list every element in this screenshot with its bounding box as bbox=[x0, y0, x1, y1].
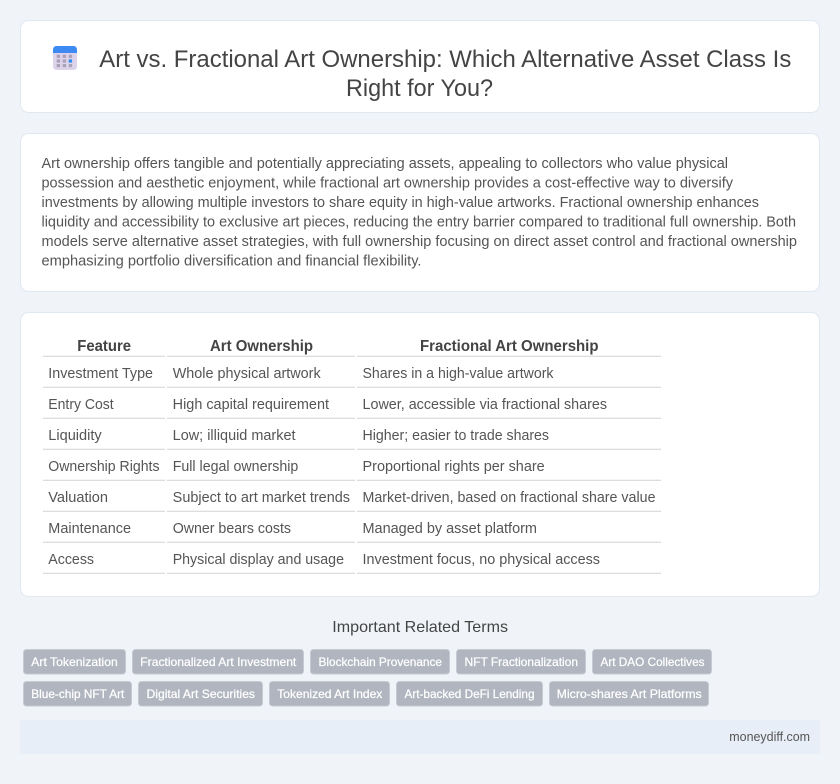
tag: Micro-shares Art Platforms bbox=[550, 682, 708, 706]
table row: liquidity: Higher; easier to trade shares bbox=[362, 428, 549, 444]
tag: Blue-chip NFT Art bbox=[24, 682, 132, 706]
table row: entry cost: High capital requirement bbox=[173, 397, 329, 413]
table row: entry cost bbox=[43, 397, 661, 419]
table row: investment type bbox=[43, 366, 661, 388]
table row: maintenance: Maintenance bbox=[48, 521, 131, 537]
table row: valuation bbox=[43, 490, 661, 512]
table row: access bbox=[43, 552, 661, 574]
table header row: Fractional Art Ownership bbox=[420, 338, 599, 355]
tag: Art DAO Collectives bbox=[592, 650, 712, 674]
tags: related terms bbox=[24, 650, 712, 706]
table row: entry cost: Entry Cost bbox=[48, 397, 114, 413]
tag: Micro-shares Art Platforms: Micro-shares Art Platforms bbox=[557, 687, 702, 701]
table row: investment type: Investment Type bbox=[48, 366, 153, 382]
text block: introduction paragraph: emphasizing portfolio diversification and financial flexibility. bbox=[42, 254, 422, 270]
table row: investment type: Whole physical artwork bbox=[173, 366, 321, 382]
table row: maintenance: Managed by asset platform bbox=[362, 521, 537, 537]
text block: introduction paragraph: investments by allowing multiple investors to share equity in high-value artworks. Fractional ownership enhances bbox=[42, 195, 759, 211]
panel: header bbox=[20, 20, 820, 112]
table row: ownership rights: Proportional rights per share bbox=[362, 459, 545, 475]
table row: liquidity: Liquidity bbox=[48, 428, 102, 444]
tag: Digital Art Securities: Digital Art Securities bbox=[146, 687, 255, 701]
table row: access: Investment focus, no physical access bbox=[362, 552, 600, 568]
text block: introduction paragraph: models serve alternative asset strategies, with full ownership focusing on direct asset control and fractional ownership bbox=[42, 234, 797, 250]
tag: Fractionalized Art Investment: Fractionalized Art Investment bbox=[140, 655, 297, 669]
footer: moneydiff.com bbox=[729, 729, 810, 744]
title: Art vs. Fractional Art Ownership: Which Alternative Asset Class Is bbox=[99, 46, 791, 73]
table header row: Art Ownership bbox=[210, 338, 313, 355]
table row: valuation: Subject to art market trends bbox=[173, 490, 350, 506]
table row: valuation: Market-driven, based on fractional share value bbox=[362, 490, 656, 506]
tag: Digital Art Securities bbox=[138, 682, 262, 706]
tag: Blockchain Provenance bbox=[310, 650, 450, 674]
table row: access: Physical display and usage bbox=[173, 552, 344, 568]
table row: maintenance: Owner bears costs bbox=[173, 521, 291, 537]
table row: ownership rights bbox=[43, 459, 661, 481]
heading: important related terms: Important Related Terms bbox=[332, 619, 508, 636]
text block: introduction paragraph: Art ownership offers tangible and potentially appreciating assets, appealing to collectors who value physical bbox=[42, 156, 728, 172]
text block: introduction paragraph bbox=[42, 156, 797, 270]
tag: Art Tokenization: Art Tokenization bbox=[31, 655, 118, 669]
table row: maintenance bbox=[43, 521, 661, 543]
table row: investment type: Shares in a high-value artwork bbox=[362, 366, 554, 382]
table row: entry cost: Lower, accessible via fractional shares bbox=[362, 397, 607, 413]
table header row bbox=[43, 338, 661, 357]
text block: introduction paragraph: liquidity and accessibility to exclusive art pieces, reducing the entry barrier compared to traditional full ownership. Both bbox=[42, 214, 796, 230]
panel: comparison table bbox=[20, 312, 820, 596]
tag: Tokenized Art Index: Tokenized Art Index bbox=[277, 687, 382, 701]
table row: ownership rights: Full legal ownership bbox=[173, 459, 298, 475]
table row: ownership rights: Ownership Rights bbox=[48, 459, 159, 475]
tag: Fractionalized Art Investment bbox=[132, 650, 304, 674]
table row: valuation: Valuation bbox=[48, 490, 108, 506]
tag: NFT Fractionalization: NFT Fractionalization bbox=[464, 655, 578, 669]
panel: introduction bbox=[20, 134, 820, 292]
table row: liquidity: Low; illiquid market bbox=[173, 428, 296, 444]
icon: calendar bbox=[53, 46, 77, 70]
tag: Tokenized Art Index bbox=[270, 682, 390, 706]
table header row: Feature bbox=[77, 338, 131, 355]
tag: Art Tokenization bbox=[24, 650, 126, 674]
tag: Art-backed DeFi Lending: Art-backed DeFi Lending bbox=[404, 687, 534, 701]
tag: NFT Fractionalization bbox=[456, 650, 586, 674]
text block: introduction paragraph: possession and aesthetic enjoyment, while fractional art ownership provides a cost-effective way to diversify bbox=[42, 176, 734, 192]
table row: liquidity bbox=[43, 428, 661, 450]
tag: Art DAO Collectives: Art DAO Collectives bbox=[600, 655, 704, 669]
title bbox=[99, 46, 791, 102]
table row: access: Access bbox=[48, 552, 94, 568]
tag: Art-backed DeFi Lending bbox=[396, 682, 542, 706]
tag: Blockchain Provenance: Blockchain Provenance bbox=[318, 655, 442, 669]
tag: Blue-chip NFT Art: Blue-chip NFT Art bbox=[31, 687, 125, 701]
title: Right for You? bbox=[346, 75, 493, 102]
footer bbox=[20, 720, 820, 754]
